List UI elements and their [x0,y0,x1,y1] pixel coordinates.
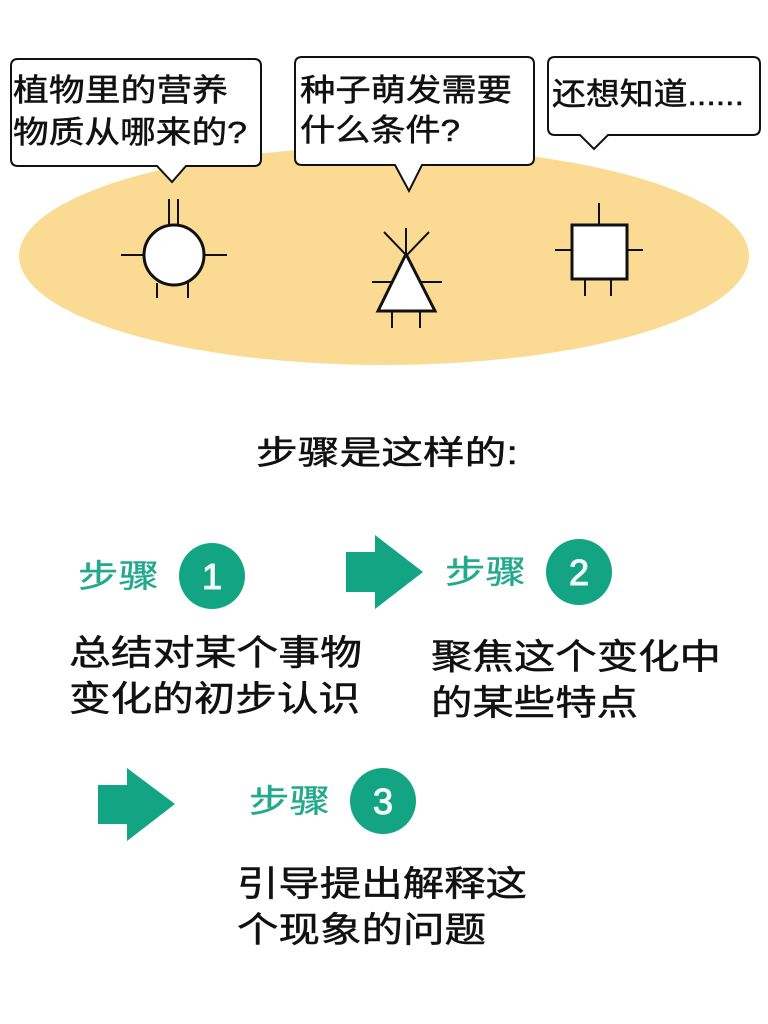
speech bubble 1 [11,59,261,182]
step 1 text [69,634,362,719]
step 1 label [78,543,245,609]
speech bubble 1: 植物里的营养 [13,73,228,108]
step 3 label: 3 [373,781,393,822]
speech bubble 1: 物质从哪来的? [13,115,247,150]
step 3 text: 引导提出解释这 [237,865,527,904]
step 1 text: 变化的初步认识 [69,680,360,719]
speech bubble 2 [295,57,534,191]
icon: square figure [555,203,643,296]
icon: circle figure [121,199,227,298]
step 2 text [431,638,721,723]
step 1 label: 1 [202,556,222,597]
step 2 label [445,539,612,605]
arrow 1 [346,535,423,609]
step 3 label: 步骤 [249,783,330,819]
icon: triangle figure [372,228,442,328]
panel: yellow ellipse [19,147,749,365]
step 2 text: 聚焦这个变化中 [431,638,721,677]
speech bubble 3 [548,57,760,149]
arrow 2 [98,768,175,841]
step 2 label: 2 [569,552,589,593]
heading: steps intro: 步骤是这样的: [256,434,518,471]
speech bubble 2: 什么条件? [300,113,460,148]
speech bubble 3: 还想知道...... [552,77,744,112]
step 3 label [249,768,416,834]
step 3 text: 个现象的问题 [237,911,486,950]
step 1 label: 步骤 [78,558,159,594]
step 2 text: 的某些特点 [431,684,638,723]
speech bubble 2: 种子萌发需要 [300,73,512,108]
step 3 text [237,865,527,950]
step 2 label: 步骤 [445,554,526,590]
step 1 text: 总结对某个事物 [69,634,362,673]
